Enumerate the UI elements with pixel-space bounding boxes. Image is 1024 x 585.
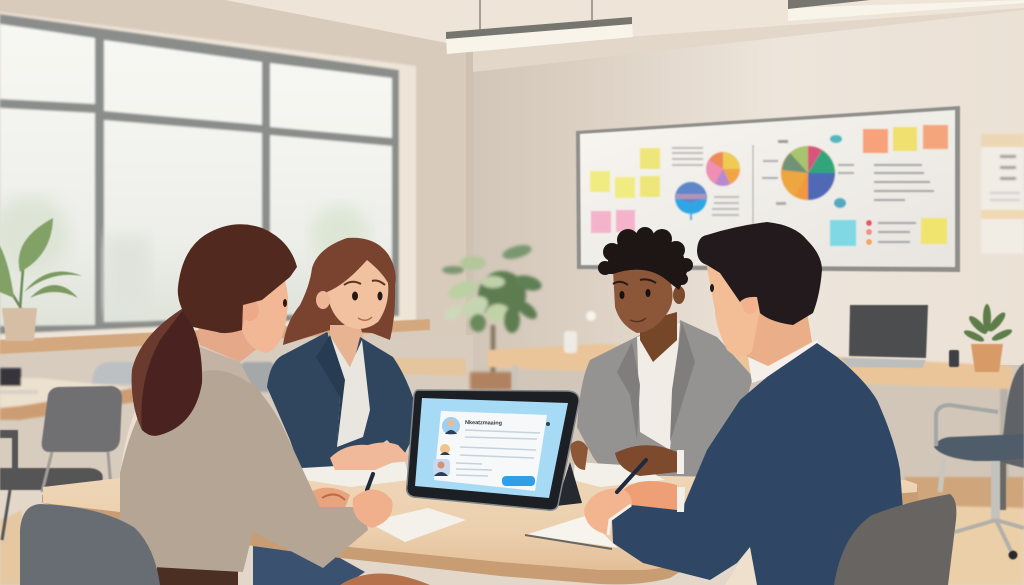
hair [697,222,822,325]
desk plant [949,304,1013,372]
eye [283,299,287,307]
wall poster [981,134,1024,254]
foreground chair: left [20,504,160,585]
tablet button [502,476,535,486]
meeting table [42,470,918,584]
list lines on board: right [874,165,934,242]
notes and hands on table: back woman [302,442,412,487]
shirt [328,333,370,447]
jacket [612,343,903,585]
knee [340,574,430,585]
laptop [841,305,928,368]
hair [178,224,297,333]
ceiling lights [446,0,1024,54]
ear [673,286,685,304]
ponytail [132,307,202,436]
neck [640,312,677,362]
ear [742,292,758,314]
dark skirt [157,565,238,585]
table edge [42,488,918,584]
suit [577,320,753,480]
person: dark-skinned man in grey suit [577,227,753,480]
pie chart: large [762,135,854,208]
tablet body [407,390,579,510]
tablet content card [434,411,547,491]
ear [241,299,259,321]
cuff and hand [584,481,685,535]
person: right man in navy suit [584,222,903,585]
jacket [120,347,368,572]
neck [330,325,364,372]
window [0,12,416,340]
tablet avatars [433,417,460,476]
neck [198,310,262,362]
notebook on table [525,516,618,549]
lower skirt [253,546,365,585]
collar [748,340,820,383]
back left desks [0,358,467,420]
tall potted plant [442,242,543,390]
tablet heading: Nkeatzmaaing [465,420,502,427]
ear [316,291,330,309]
sticky notes: left cluster [590,148,660,233]
curly hair [598,227,693,290]
window plant [0,218,82,341]
pie chart: blue [675,182,707,220]
hand on table [310,488,350,508]
tablet text lines [456,430,540,476]
paper and hands on table: grey-suit man [570,441,684,487]
floor [0,477,1024,585]
whiteboard [576,106,960,272]
window sill shelf [0,319,430,354]
back left chair [0,386,122,540]
eyes and smile [613,279,656,322]
text lines on board: left [672,148,739,215]
paper note on table [367,508,466,542]
pen [367,474,373,490]
lapels [617,322,695,442]
tablet stand [556,462,582,506]
foreground chair: right [834,494,956,585]
hair [283,238,396,345]
eyes and smile [344,280,385,320]
right office chair [934,363,1024,560]
face [242,280,288,353]
pen [617,460,646,492]
neck [745,300,812,368]
person: back-left woman in navy blazer [267,238,420,470]
table top [43,470,917,570]
eye [710,284,714,292]
jacket collar [200,347,252,385]
face [613,266,673,333]
sticky notes: right cluster [830,125,948,246]
shirt [637,323,680,450]
tablet [407,390,582,510]
face [327,260,388,329]
face [706,262,760,357]
back right desk [487,311,1012,479]
pie chart: small [706,152,740,186]
blazer [267,332,420,470]
inner shirt strip [120,395,142,510]
writing hand [353,489,393,528]
person: left woman with ponytail [120,224,430,585]
under-sleeve floor gap [725,545,760,585]
tablet screen [415,398,568,498]
